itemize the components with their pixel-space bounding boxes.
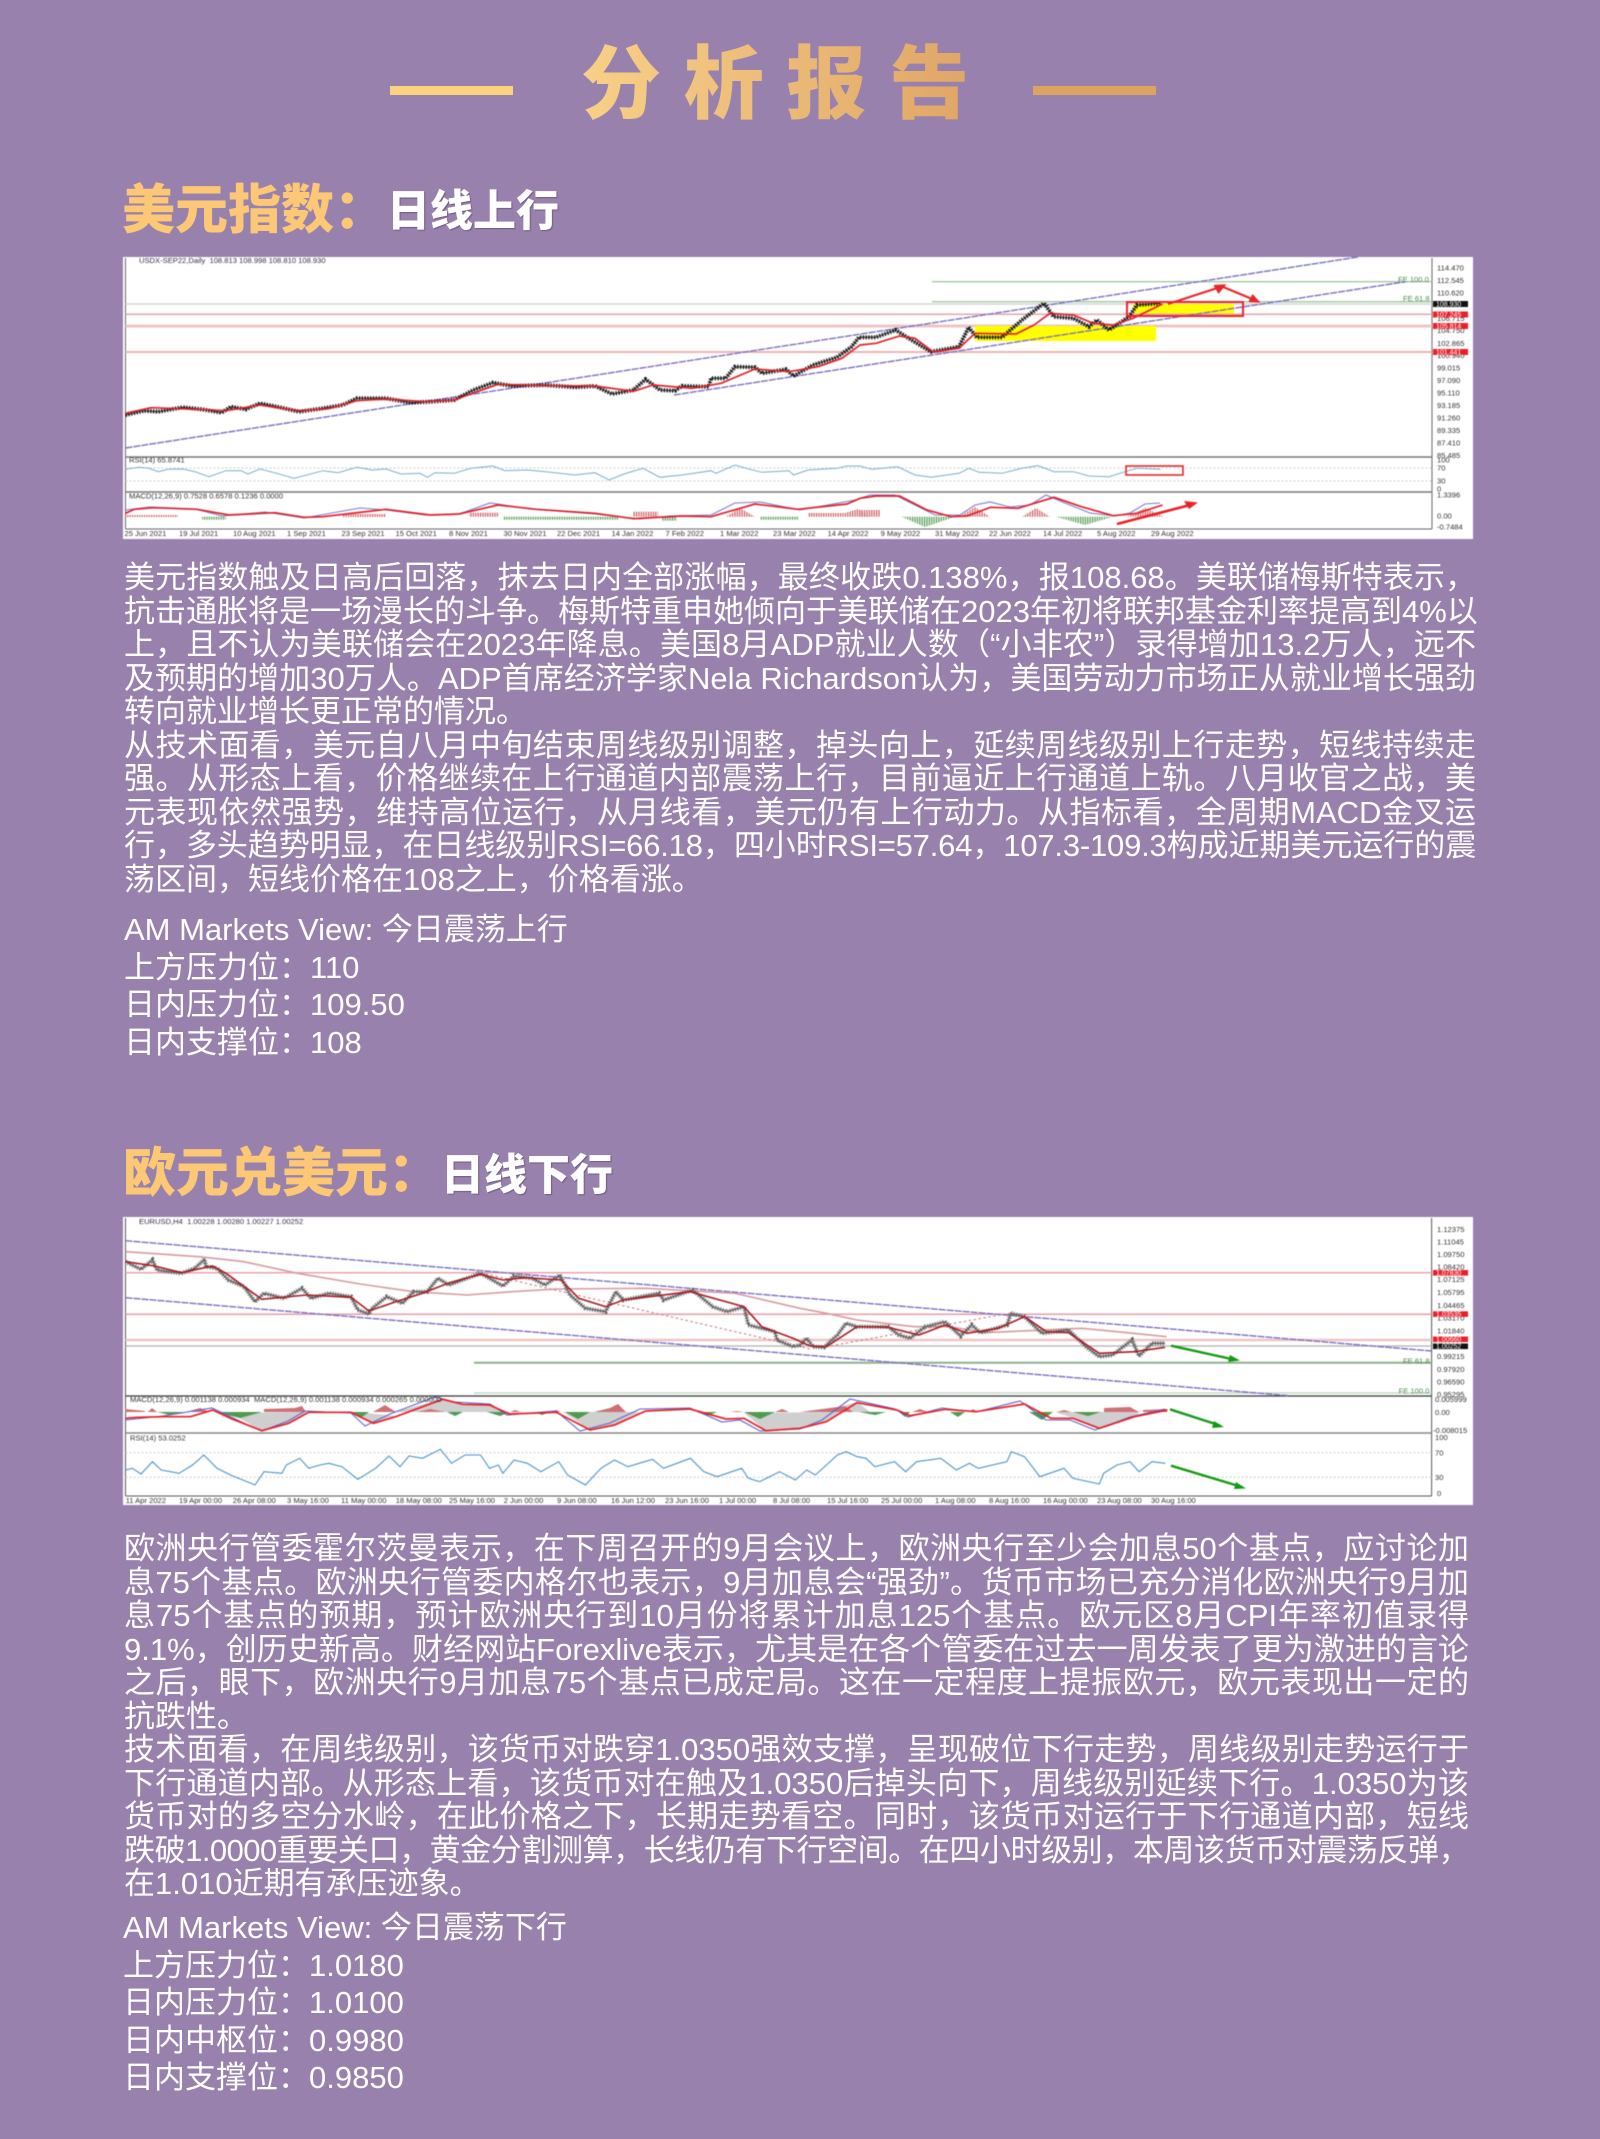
date axis: 19 Jul 2021 [179,529,218,538]
MACD panel: MACD(12,26,9) 0.001138 0.000934 MACD(12,26,9) 0.001138 0.000934 0.000265 0.000000 [130,1395,441,1404]
date axis: 18 May 08:00 [396,1496,442,1505]
price axis: -0.008015 [1433,1426,1467,1435]
price axis: 91.260 [1437,414,1460,422]
long moving average [126,1252,1167,1337]
text block: EUR analysis: 息75个基点。欧洲央行管委内格尔也表示，9月加息会“强劲”。货币市场已充分消化欧洲央行9月加 [124,1564,1469,1600]
price axis: 1.3396 [1437,490,1460,500]
price axis: 30 [1437,476,1445,486]
date axis: 23 Jun 16:00 [665,1496,709,1505]
short moving average [126,1262,1165,1353]
price axis: 0.96590 [1437,1378,1464,1386]
date axis: 1 Aug 08:00 [935,1496,976,1505]
price axis: 87.410 [1437,438,1460,448]
price axis: 89.335 [1437,426,1460,435]
text block: USD analysis [124,560,1478,896]
text block: EUR analysis: 技术面看，在周线级别，该货币对跌穿1.0350强效支撑，呈现破位下行走势，周线级别走势运行于 [124,1732,1469,1767]
price axis: 106.715 [1437,314,1464,323]
date axis: 14 Jan 2022 [612,529,653,538]
date axis: 16 Jun 12:00 [611,1496,655,1505]
date axis: 30 Aug 16:00 [1151,1496,1196,1505]
date axis: 1 Sep 2021 [287,529,326,538]
yellow zones [975,304,1234,341]
MACD panel [125,492,1198,527]
price axis: 1.07125 [1437,1275,1464,1284]
price axis: 99.015 [1437,364,1460,372]
price axis: -0.7484 [1437,522,1463,532]
channel lines [126,1241,1432,1396]
price axis: FE 100.0 [1398,275,1429,284]
text block: USD market view: 日内支撑位：108 [124,1024,362,1060]
date axis: 1 Mar 2022 [720,529,758,538]
price axis: 85.485 [1437,451,1460,460]
text block: USD analysis: 荡区间，短线价格在108之上，价格看涨。 [124,862,703,896]
text block: EUR analysis: 下行通道内部。从形态上看，该货币对在触及1.0350后掉头向下，周线级别延续下行。1.0350为该 [124,1766,1469,1800]
date axis: 29 Aug 2022 [1151,529,1194,538]
price axis: 1.07830 [1436,1270,1461,1277]
text block: USD market view: 上方压力位：110 [124,950,359,984]
date axis: 14 Jul 2022 [1043,529,1082,538]
text block: USD analysis: 强。从形态上看，价格继续在上行通道内部震荡上行，目前逼近上行通道上轨。八月收官之战，美 [124,761,1476,796]
price axis: 107.245 [1436,312,1461,319]
price candles [126,1259,1165,1357]
title: 分析报告 [581,40,992,129]
date axis: 8 Aug 16:00 [989,1496,1030,1505]
text block: EUR analysis: 在1.010近期有承压迹象。 [124,1866,481,1901]
price axis: 1.03535 [1436,1312,1461,1318]
date axis: 30 Nov 2021 [504,529,547,538]
text block: EUR market view [123,1910,567,2095]
text block: EUR market view: 上方压力位：1.0180 [123,1948,404,1982]
green down arrow on price [1171,1346,1240,1362]
right title dash [1033,86,1156,95]
date axis: 25 May 16:00 [449,1496,495,1505]
date axis: 8 Nov 2021 [449,529,488,538]
price axis: 0.97920 [1437,1365,1464,1374]
price axis: 100 [1435,1433,1448,1442]
text block: USD market view: 日内压力位：109.50 [124,987,405,1022]
text block: EUR market view: 日内支撑位：0.9850 [123,2060,404,2095]
subheading: daily down: 日线下行 [441,1152,613,1200]
price axis: 108.930 [1436,302,1461,308]
price axis: 0.95295 [1437,1390,1464,1399]
date axis: 2 Jun 00:00 [504,1496,543,1505]
date axis: 31 May 2022 [935,529,979,538]
price axis: 1.04465 [1437,1301,1464,1310]
price axis: 1.00660 [1436,1337,1461,1344]
date axis: 3 May 16:00 [287,1496,329,1505]
price axis: 70 [1435,1448,1443,1458]
price axis: 0.005999 [1435,1395,1467,1404]
price axis: 1.11045 [1437,1238,1464,1246]
date axis: 10 Aug 2021 [233,529,276,538]
text block: EUR market view: 日内中枢位：0.9980 [123,2022,404,2058]
text block: USD analysis: 转向就业增长更正常的情况。 [124,694,527,729]
price axis [1398,264,1468,532]
price axis: 0.00 [1437,512,1452,520]
text block: USD analysis: 美元指数触及日高后回落，抹去日内全部涨幅，最终收跌0.138%，报108.68。美联储梅斯特表示， [124,560,1476,595]
date axis: 23 Sep 2021 [342,529,385,538]
text block: EUR analysis: 之后，眼下，欧洲央行9月加息75个基点已成定局。这在一定程度上提振欧元，欧元表现出一定的 [124,1665,1469,1700]
price axis: 1.12375 [1437,1225,1464,1234]
price axis: 0.00 [1435,1408,1450,1417]
date axis: 22 Dec 2021 [557,529,600,538]
date axis: 7 Feb 2022 [666,529,704,538]
horizontal levels [126,282,1432,352]
MACD panel: MACD(12,26,9) 0.7528 0.6578 0.1236 0.0000 [129,492,283,500]
date axis: 25 Jun 2021 [124,529,166,538]
text block: EUR analysis: 9.1%，创历史新高。财经网站Forexlive表示，尤其是在各个管委在过去一周发表了更为激进的言论 [124,1632,1469,1666]
chart: EURUSD H4 [122,1216,1474,1506]
date axis: 11 Apr 2022 [126,1496,166,1505]
text block: USD market view: AM Markets View: 今日震荡上行 [124,912,568,947]
date axis [126,1496,1196,1505]
text block: EUR analysis: 抗跌性。 [124,1698,248,1734]
text block: EUR analysis [124,1531,1469,1901]
text block: EUR analysis: 货币对的多空分水岭，在此价格之下，长期走势看空。同时，该货币对运行于下行通道内部，短线 [124,1799,1469,1834]
RSI panel [126,456,1432,481]
text block: USD market view [124,912,568,1060]
date axis: 14 Apr 2022 [828,529,868,538]
price axis: 104.750 [1437,326,1464,335]
price axis: 112.545 [1437,276,1464,285]
horizontal levels [126,1273,1432,1393]
text block: EUR market view: 日内压力位：1.0100 [123,1985,404,2020]
RSI panel: RSI(14) 65.8741 [129,456,185,464]
price axis: 1.08420 [1437,1262,1464,1272]
text block: EUR analysis: 欧洲央行管委霍尔茨曼表示，在下周召开的9月会议上，欧洲央行至少会加息50个基点，应讨论加 [124,1531,1469,1566]
date axis: 19 Apr 00:00 [179,1496,222,1505]
date axis: 23 Mar 2022 [773,529,816,538]
text block: EUR market view: AM Markets View: 今日震荡下行 [123,1910,567,1945]
price axis: 1.09750 [1437,1250,1464,1259]
date axis: 11 May 00:00 [341,1496,386,1505]
price axis: 30 [1435,1473,1443,1482]
heading: US dollar index: 美元指数： [122,181,387,240]
price axis: FE 61.8 [1403,1356,1430,1366]
left title dash [390,86,513,95]
RSI panel [126,1434,1432,1489]
date axis: 23 Aug 08:00 [1097,1496,1142,1505]
price axis: 70 [1437,464,1445,472]
price axis: 93.185 [1437,401,1460,410]
date axis: 15 Oct 2021 [396,529,437,538]
subheading: daily up: 日线上行 [387,188,559,236]
date axis: 22 Jun 2022 [989,529,1031,538]
moving average [126,304,1162,413]
price axis: 114.470 [1437,264,1464,272]
price candles [126,303,1160,415]
price axis: 0 [1437,484,1441,494]
date axis: 1 Jul 00:00 [719,1496,756,1505]
date axis: 16 Aug 00:00 [1043,1496,1088,1505]
text block: USD analysis: 行，多头趋势明显，在日线级别RSI=66.18，四小时RSI=57.64，107.3-109.3构成近期美元运行的震 [124,828,1476,863]
MACD panel [125,1395,1224,1431]
text block: EUR analysis: 息75个基点的预期，预计欧洲央行到10月份将累计加息125个基点。欧元区8月CPI年率初值录得 [124,1598,1469,1633]
date axis: 9 Jun 08:00 [557,1496,597,1505]
price axis: 101.441 [1436,350,1461,356]
RSI panel: RSI(14) 53.0252 [130,1434,186,1442]
text block: USD analysis: 元表现依然强势，维持高位运行，从月线看，美元仍有上行动力。从指标看，全周期MACD金叉运 [124,794,1476,830]
text block: USD analysis: 上，且不认为美联储会在2023年降息。美国8月ADP就业人数（“小非农”）录得增加13.2万人，远不 [124,627,1476,662]
price axis: 1.05795 [1437,1288,1464,1297]
text block: USD analysis: 从技术面看，美元自八月中旬结束周线级别调整，掉头向上，延续周线级别上行走势，短线持续走 [124,728,1476,762]
price axis: 100.940 [1437,351,1464,360]
price axis: 0.99215 [1437,1352,1464,1361]
date axis: 15 Jul 16:00 [827,1496,868,1505]
date axis [124,529,1194,538]
date axis: 8 Jul 08:00 [773,1496,810,1505]
chart header: EURUSD,H4 1.00228 1.00280 1.00227 1.00252 [139,1217,303,1226]
heading: EUR/USD: 欧元兑美元： [123,1144,441,1203]
date axis: 9 May 2022 [881,529,920,538]
dotted trend lines [476,1272,1011,1349]
red range box [1127,302,1243,316]
price axis: FE 61.8 [1403,294,1430,303]
forecast arrow up then down [1168,286,1258,304]
price axis: 95.110 [1437,388,1460,398]
text block: USD analysis: 及预期的增加30万人。ADP首席经济学家Nela Richardson认为，美国劳动力市场正从就业增长强劲 [124,660,1476,696]
text block: EUR analysis: 跌破1.0000重要关口，黄金分割测算，长线仍有下行空间。在四小时级别，本周该货币对震荡反弹， [124,1832,1469,1868]
date axis: 25 Jul 00:00 [881,1496,922,1505]
date axis: 5 Aug 2022 [1097,529,1135,538]
text block: USD analysis: 抗击通胀将是一场漫长的斗争。梅斯特重申她倾向于美联储在2023年初将联邦基金利率提高到4%以 [124,594,1478,628]
channel lines [126,257,1406,448]
chart: USDX daily [122,256,1474,540]
price axis: 0 [1437,1489,1441,1498]
price axis: 1.00252 [1436,1344,1461,1351]
date axis: 26 Apr 08:00 [233,1496,276,1505]
price axis: 97.090 [1437,376,1460,385]
price axis: FE 100.0 [1399,1386,1429,1396]
price axis [1399,1225,1468,1498]
price axis: 1.03170 [1437,1314,1464,1322]
price axis: 102.865 [1437,339,1464,348]
price axis: 1.01840 [1437,1326,1464,1336]
price axis: 105.814 [1436,324,1461,330]
price axis: 100 [1437,456,1450,464]
price axis: 110.620 [1437,288,1464,298]
